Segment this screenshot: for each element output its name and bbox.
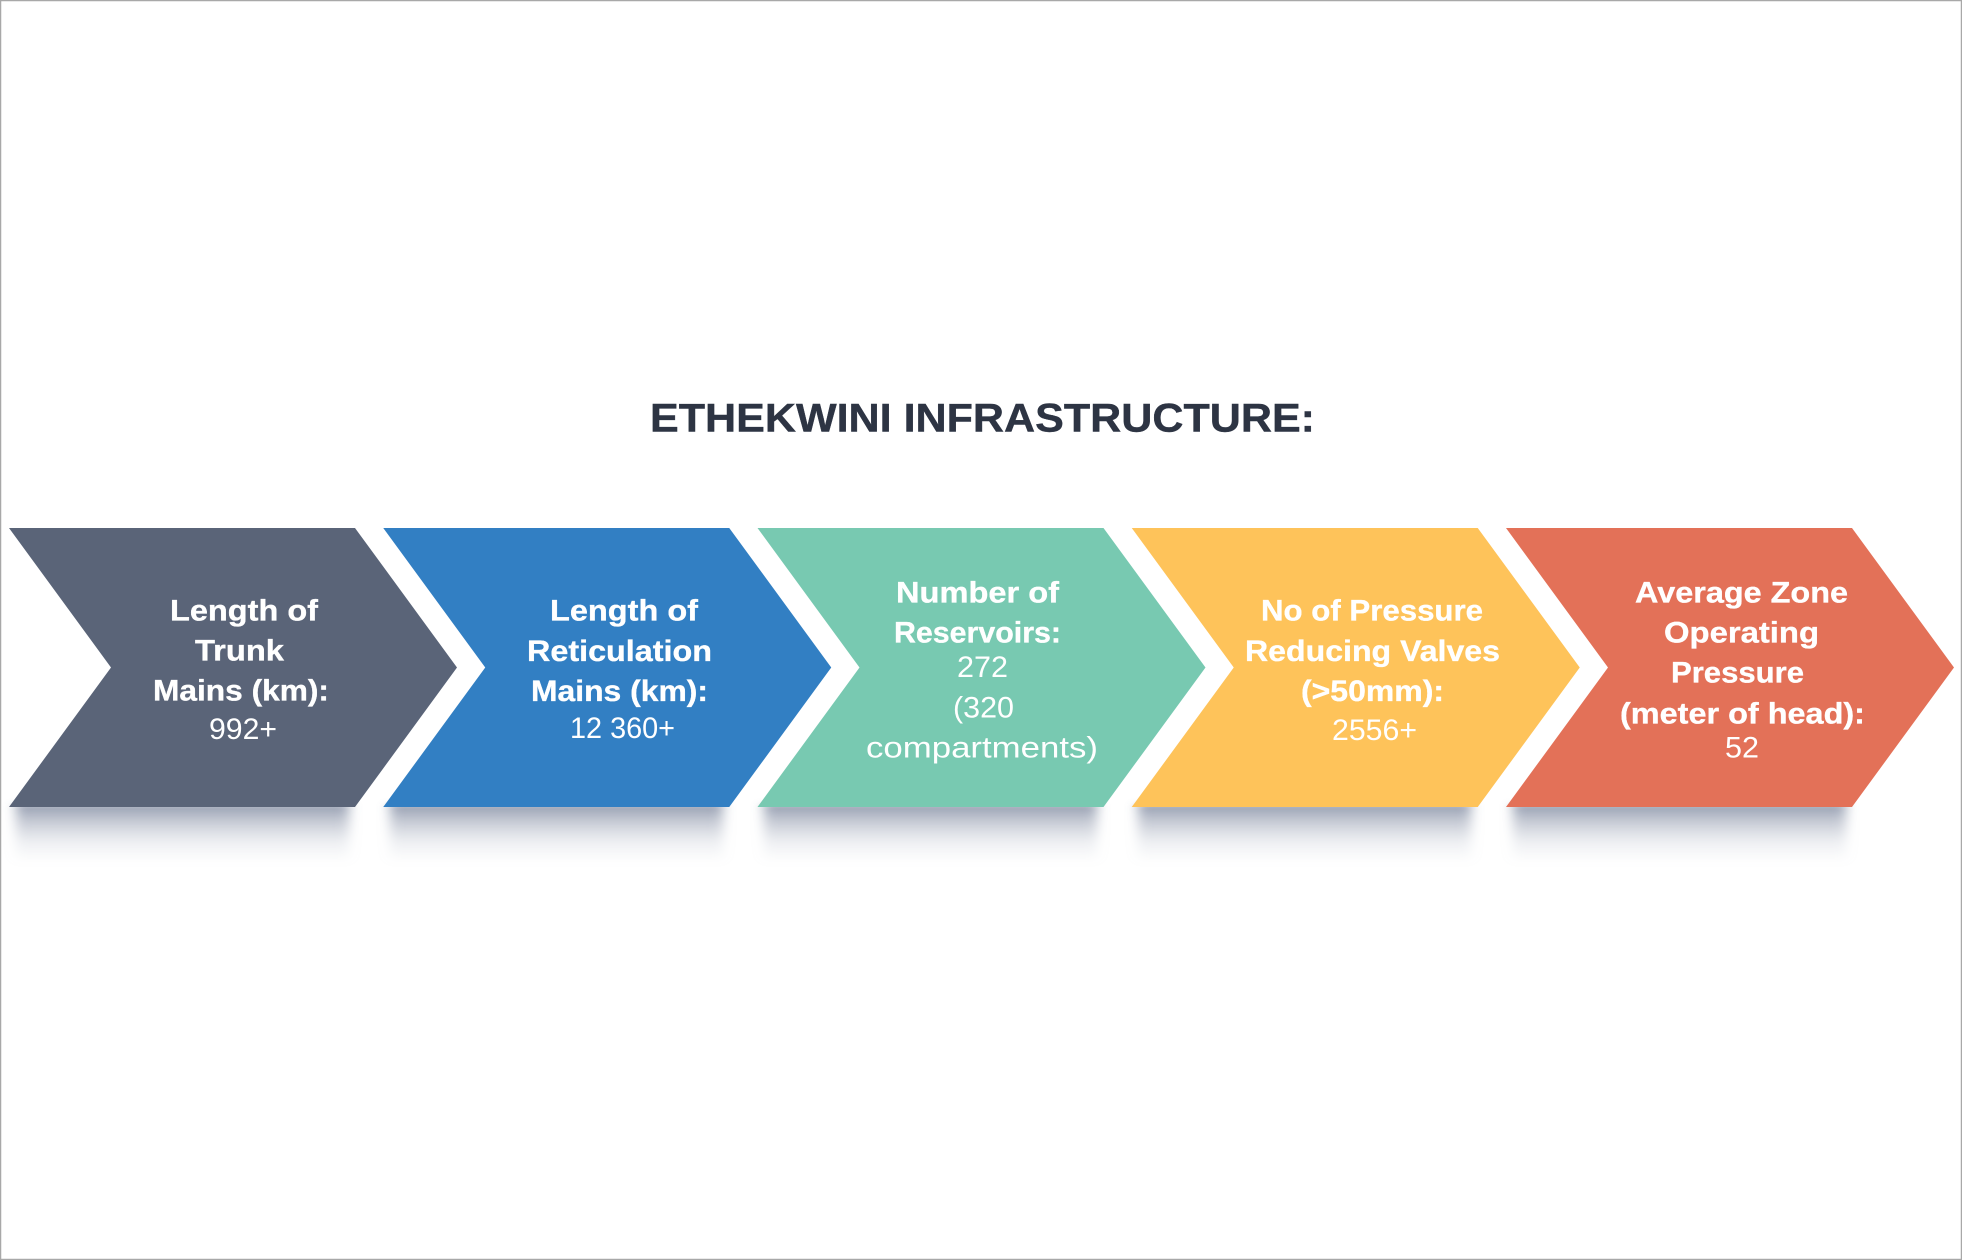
label text: Length of <box>170 595 318 628</box>
label text: Mains (km): <box>153 675 329 708</box>
panel: number of reservoirs <box>758 528 1206 864</box>
label text: Average Zone <box>1635 577 1848 610</box>
label text <box>866 577 1098 764</box>
title: ETHEKWINI INFRASTRUCTURE: <box>650 397 1315 441</box>
label text <box>153 595 329 746</box>
panel: chevron timeline <box>9 528 1954 864</box>
chevron shape <box>758 528 1206 807</box>
label text: 12 360+ <box>570 712 675 745</box>
label text: Operating <box>1664 617 1819 650</box>
shadow <box>390 804 723 864</box>
chevron shape <box>1132 528 1580 807</box>
label text <box>1620 577 1865 764</box>
label text <box>527 595 712 745</box>
label text: No of Pressure <box>1261 595 1483 628</box>
label text: compartments) <box>866 732 1098 764</box>
shadow <box>1138 804 1471 864</box>
label text: (320 <box>953 692 1014 725</box>
label text <box>1245 595 1500 747</box>
panel: average zone operating pressure <box>1506 528 1954 864</box>
label text: 272 <box>957 651 1008 684</box>
label text: (meter of head): <box>1620 698 1865 730</box>
chevron shape <box>383 528 831 807</box>
label text: Length of <box>550 595 698 628</box>
label text: Reducing Valves <box>1245 635 1500 668</box>
label text: Pressure <box>1671 657 1804 690</box>
label text: (>50mm): <box>1301 675 1444 708</box>
shadow <box>1513 804 1846 864</box>
chevron shape <box>1506 528 1954 807</box>
panel: length of reticulation mains <box>383 528 831 864</box>
label text: 992+ <box>209 713 277 746</box>
label text: Number of <box>896 577 1059 610</box>
shadow <box>764 804 1097 864</box>
label text: Mains (km): <box>531 675 708 708</box>
panel: pressure reducing valves <box>1132 528 1580 864</box>
chevron shape <box>9 528 457 807</box>
label text: 2556+ <box>1332 714 1417 747</box>
label text: Reticulation <box>527 635 712 668</box>
shadow <box>16 804 349 864</box>
label text: Trunk <box>195 635 285 668</box>
label text: 52 <box>1725 732 1759 764</box>
label text: Reservoirs: <box>894 616 1061 649</box>
panel: length of trunk mains <box>9 528 457 864</box>
